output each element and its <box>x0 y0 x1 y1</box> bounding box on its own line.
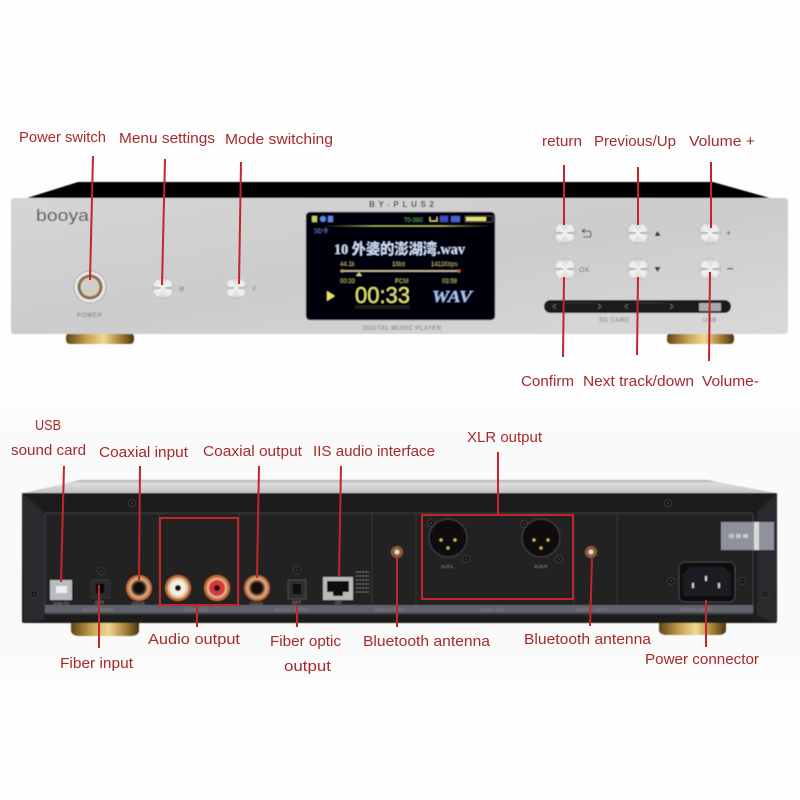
player screen: 03:58 <box>442 279 458 285</box>
label: USB sound card <box>11 417 86 582</box>
player screen: WAV <box>432 287 474 306</box>
label: Bluetooth antenna right <box>524 558 652 648</box>
front panel <box>11 198 788 334</box>
label: Menu settings: Menu settings <box>119 130 215 147</box>
label: Power switch: Power switch <box>19 129 106 146</box>
label: Previous/Up: Previous/Up <box>594 133 676 150</box>
right XLR socket: XLR-R <box>534 564 548 569</box>
optical input <box>91 580 110 605</box>
input output plate <box>45 513 753 614</box>
plate caption strip: DIGITAL INPUT <box>375 607 407 612</box>
rear view of the player <box>22 480 777 636</box>
player screen: 00:33 <box>355 282 410 308</box>
optical input: OPT <box>95 600 105 605</box>
label: USB sound card: USB <box>35 417 61 434</box>
label: Volume + <box>689 133 755 228</box>
plate caption strip <box>45 605 753 613</box>
previous button <box>627 222 660 244</box>
plate caption strip: AUDIO OUT <box>480 607 505 612</box>
label: Fiber optic output: output <box>284 658 332 675</box>
player screen: 10 外婆的澎湖湾.wav <box>334 240 465 258</box>
right chassis bevel <box>757 493 777 623</box>
label: Fiber input <box>60 585 134 672</box>
left antenna socket <box>391 546 403 558</box>
label: Next track/down <box>583 277 694 390</box>
label: Coaxial input: Coaxial input <box>99 444 189 461</box>
label: return: return <box>542 133 582 150</box>
player screen: PCM <box>395 279 408 285</box>
menu button <box>152 277 184 299</box>
player screen <box>306 212 495 320</box>
card and USB slot: SD CARD <box>599 318 630 324</box>
right antenna socket <box>585 546 597 558</box>
label: IIS audio interface: IIS audio interface <box>313 443 435 460</box>
label: Coaxial output <box>203 443 303 578</box>
coaxial input jack: COAX <box>132 601 145 606</box>
label: Volume- <box>702 272 759 390</box>
player screen: SD卡 <box>314 227 328 235</box>
volume up button: + <box>726 228 731 238</box>
label: Bluetooth antenna right: Bluetooth antenna <box>524 631 652 648</box>
right XLR socket <box>522 519 560 569</box>
label: Confirm <box>521 277 574 390</box>
plate caption strip: POWER INPUT <box>680 607 712 612</box>
label: IIS audio interface <box>313 443 435 577</box>
plate caption strip: AUDIO OUT <box>184 607 209 612</box>
label: Audio output <box>148 605 241 648</box>
label: Previous/Up <box>594 133 676 225</box>
label: Bluetooth antenna left <box>363 558 491 650</box>
highlight box: audio output <box>160 518 238 605</box>
right audio jack <box>204 575 230 601</box>
label: Coaxial output: Coaxial output <box>203 443 303 460</box>
right rear foot <box>659 620 726 635</box>
label: Mode switching: Mode switching <box>225 131 333 148</box>
coaxial output jack: COAX <box>250 601 263 606</box>
plate dividers <box>159 513 617 605</box>
optical output <box>288 580 306 605</box>
label: Menu settings <box>119 130 215 285</box>
plate caption strip: DIGITAL OUTPUT <box>274 607 311 612</box>
label: XLR output <box>467 429 543 515</box>
label: XLR output: XLR output <box>467 429 543 446</box>
label: Audio output: Audio output <box>148 631 241 648</box>
rear chassis <box>22 493 777 623</box>
label: Power switch <box>19 129 106 280</box>
optical output: OPT <box>292 600 302 605</box>
card and USB slot: USB <box>703 318 717 324</box>
top cover <box>27 182 770 198</box>
product caption: DIGITAL MUSIC PLAYER <box>363 326 442 332</box>
plate caption strip: DIGITAL INPUT <box>576 607 608 612</box>
label: Power connector: Power connector <box>645 651 759 668</box>
left audio jack <box>165 575 191 601</box>
IIS network port: I2S <box>335 600 342 605</box>
label: Confirm: Confirm <box>521 373 574 390</box>
left foot <box>66 333 134 344</box>
left XLR socket <box>429 519 467 569</box>
label: return <box>542 133 582 225</box>
brand logo: booya <box>36 206 90 225</box>
label: Bluetooth antenna left: Bluetooth antenna <box>363 633 491 650</box>
right foot <box>667 333 734 344</box>
highlight box: XLR output <box>422 515 573 599</box>
power button <box>74 271 106 319</box>
label: Power connector <box>645 600 759 668</box>
coaxial input jack <box>126 575 152 606</box>
player screen: 44.1k <box>340 262 356 268</box>
label: Volume-: Volume- <box>702 373 759 390</box>
card and USB slot <box>544 300 731 324</box>
label: Fiber input: Fiber input <box>60 655 134 672</box>
USB port <box>50 580 72 606</box>
next button <box>627 258 660 280</box>
player screen: 1411Kbps <box>431 262 458 268</box>
confirm button: OK <box>579 267 590 274</box>
confirm button <box>554 258 590 280</box>
coaxial output jack <box>244 575 270 606</box>
player screen: 70-360 <box>404 218 423 224</box>
model name: BY-PLUS2 <box>369 200 435 209</box>
label: Next track/down: Next track/down <box>583 373 694 390</box>
sticker <box>721 522 774 550</box>
volume down button <box>699 258 733 280</box>
player screen: 16bit <box>392 262 405 268</box>
label: Coaxial input <box>99 444 189 580</box>
label: Fiber optic output <box>270 605 342 675</box>
rear top cover <box>24 480 775 493</box>
mode button <box>225 277 257 299</box>
menu button: M <box>179 287 184 293</box>
power button: POWER <box>77 313 102 319</box>
power socket <box>679 562 735 602</box>
label: USB sound card: sound card <box>11 442 86 459</box>
front view of the player <box>11 182 788 344</box>
mode button: F <box>253 287 257 293</box>
left rear foot <box>71 620 139 636</box>
return button <box>554 222 591 244</box>
plate caption strip: DIGITAL INPUT <box>82 607 114 612</box>
label: Fiber optic output: Fiber optic <box>270 633 342 650</box>
left chassis bevel <box>22 493 44 623</box>
left XLR socket: XLR-L <box>441 564 454 569</box>
USB port: USB PC <box>53 601 71 606</box>
volume up button <box>699 222 731 244</box>
IIS network port <box>323 572 369 605</box>
label: Volume +: Volume + <box>689 133 755 150</box>
player screen: 00:33 <box>340 279 356 285</box>
chassis screws <box>30 500 768 598</box>
